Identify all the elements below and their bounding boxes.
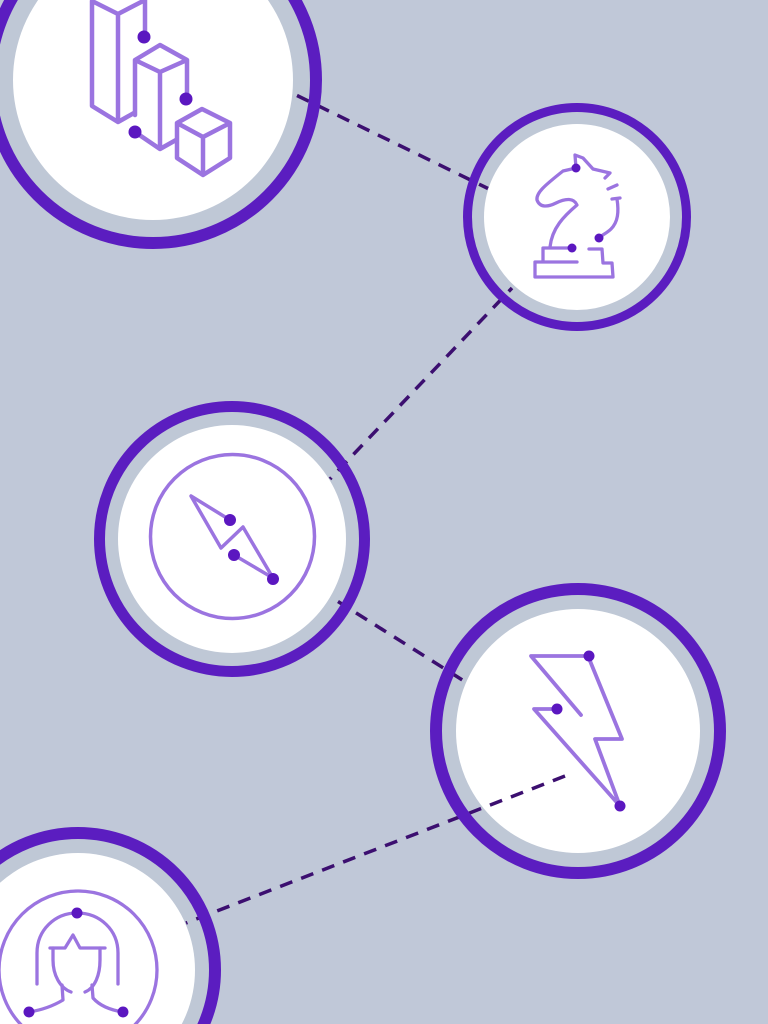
dashed connector: bolt to person [186, 776, 565, 923]
icon: descending 3D bars [92, 0, 230, 175]
ring: lightning bolt node [436, 589, 720, 873]
icon: compass [150, 454, 314, 618]
dashed connector: bars to knight [297, 96, 488, 188]
icon: chess knight [535, 155, 620, 277]
node: bar chart [0, 0, 313, 240]
ring: person node [0, 833, 215, 1024]
node: lightning bolt [436, 589, 720, 873]
ring: compass node [100, 406, 364, 672]
icon: person with crown [0, 891, 157, 1024]
ring: bar chart node [0, 0, 316, 243]
node: person [0, 833, 215, 1024]
dashed connector: compass to bolt [338, 602, 464, 681]
node: compass [100, 407, 364, 671]
ring: chess knight node [468, 108, 686, 326]
dashed connector: knight to compass [330, 288, 512, 479]
icon: lightning bolt [531, 650, 626, 812]
node: chess knight [467, 107, 687, 327]
